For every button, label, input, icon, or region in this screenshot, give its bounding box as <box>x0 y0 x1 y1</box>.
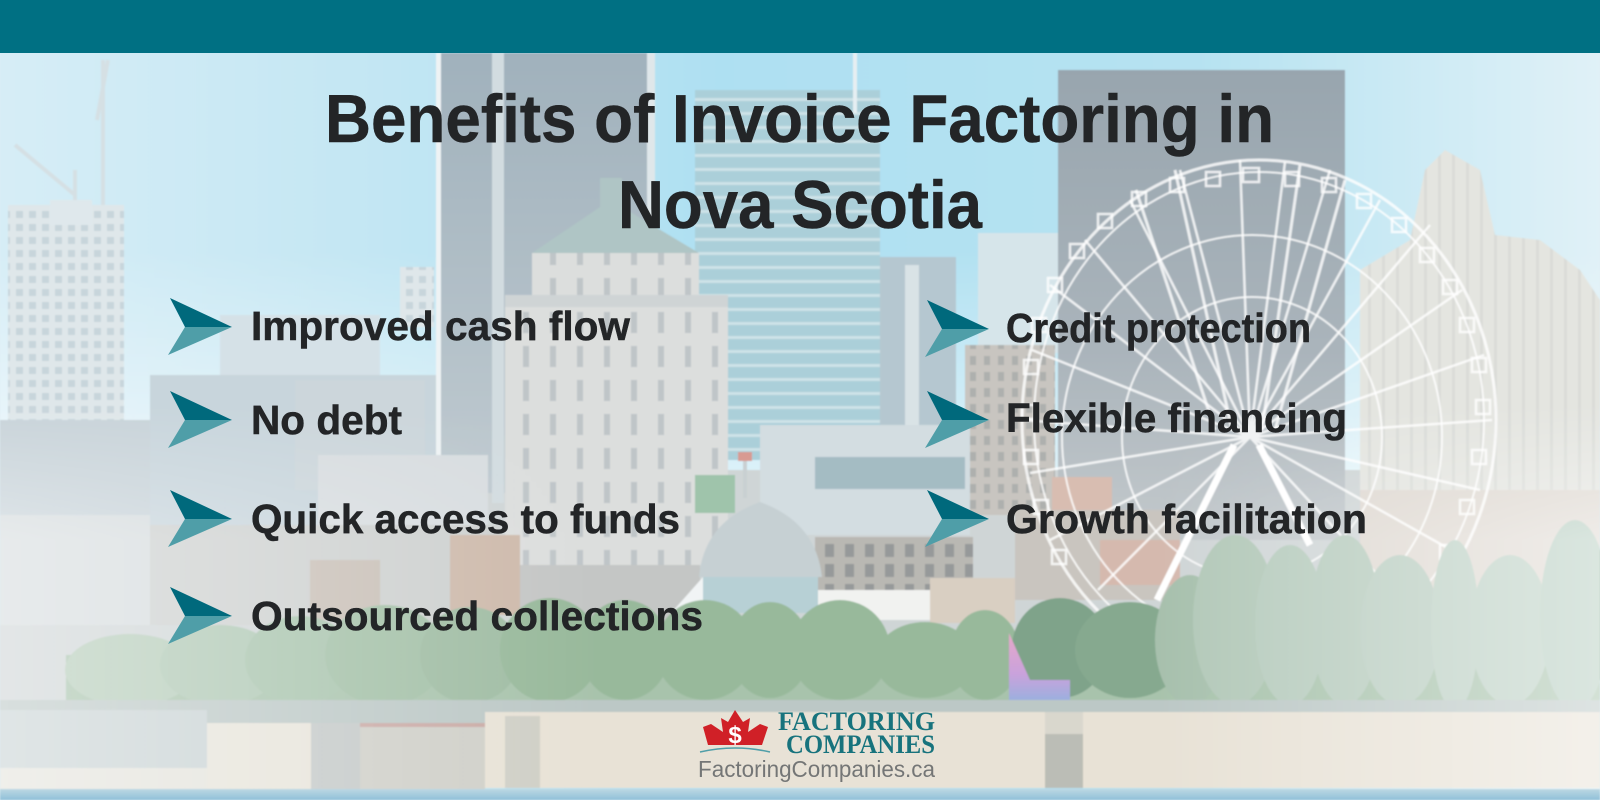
base band of lower city <box>0 470 1600 710</box>
benefit: Flexible financing: Flexible financing <box>1006 395 1347 441</box>
icon: arrow <box>168 490 232 547</box>
icon: arrow <box>168 391 232 448</box>
top banner bar <box>0 0 1600 53</box>
title <box>325 81 1274 243</box>
logo: Factoring Companies: FACTORING <box>778 707 935 736</box>
title: Benefits of Invoice Factoring in <box>325 81 1274 157</box>
benefit: No debt <box>168 391 402 448</box>
benefit: Growth facilitation: Growth facilitation <box>1006 496 1367 542</box>
colourful banner <box>1009 633 1070 708</box>
logo: Factoring Companies: FactoringCompanies.ca <box>698 756 935 782</box>
title: Nova Scotia <box>618 167 983 243</box>
benefit: Improved cash flow <box>168 298 630 355</box>
icon: arrow <box>925 490 989 547</box>
lower city blocks <box>318 455 488 535</box>
benefit: Growth facilitation <box>925 490 1367 547</box>
benefit: Credit protection <box>925 300 1311 357</box>
benefit: No debt: No debt <box>251 397 402 443</box>
quay wall <box>207 723 485 790</box>
haze over lower scene <box>0 454 1600 789</box>
gondolas <box>1022 168 1490 564</box>
left towers <box>8 205 124 445</box>
centre glass tower <box>695 90 880 460</box>
crane <box>15 60 108 205</box>
icon: arrow <box>168 298 232 355</box>
water <box>0 789 1600 800</box>
benefit: Outsourced collections <box>168 587 703 644</box>
icon: arrow <box>925 300 989 357</box>
trees <box>65 520 1600 710</box>
benefit: Credit protection: Credit protection <box>1006 305 1311 351</box>
icon: arrow <box>168 587 232 644</box>
benefit: Outsourced collections: Outsourced collections <box>251 593 703 639</box>
benefit: Flexible financing <box>925 391 1347 448</box>
icon: maple leaf <box>700 710 770 752</box>
dome <box>699 502 822 577</box>
logo: Factoring Companies: COMPANIES <box>786 730 935 759</box>
benefit: Improved cash flow: Improved cash flow <box>251 303 630 349</box>
right pale buildings <box>1360 150 1600 560</box>
ferris wheel <box>1022 160 1496 680</box>
icon: arrow <box>925 391 989 448</box>
big tower <box>436 53 654 493</box>
right dark tower <box>1058 70 1345 540</box>
green roof building <box>532 178 699 253</box>
railing and promenade <box>0 700 1600 725</box>
icon: maple leaf: $ <box>728 722 742 749</box>
logo: Factoring Companies <box>698 707 935 782</box>
benefit: Quick access to funds <box>168 490 680 547</box>
benefit: Quick access to funds: Quick access to funds <box>251 496 680 542</box>
